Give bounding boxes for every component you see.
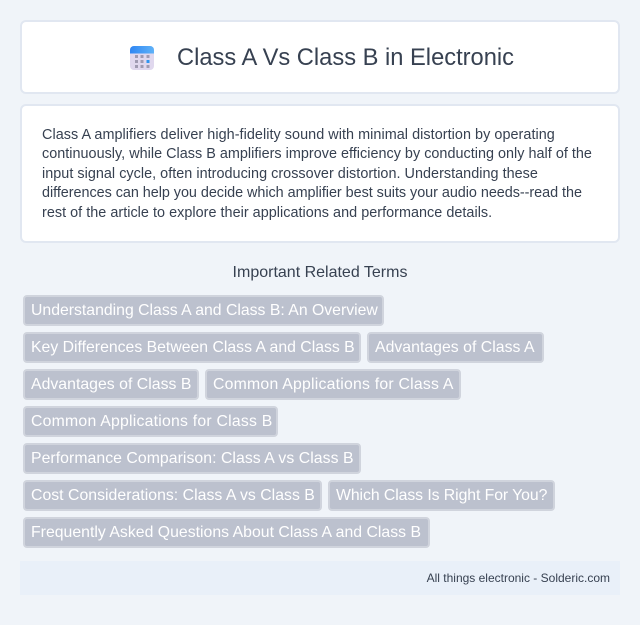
- tag list: related terms: Common Applications for Class A: [213, 376, 454, 393]
- footer text: All things electronic - Solderic.com: [427, 571, 610, 585]
- tag list: related terms: Performance Comparison: Class A vs Class B: [31, 450, 354, 467]
- text block: intro paragraph: rest of the article to explore their applications and performance details.: [42, 205, 492, 221]
- tag list: related terms: Frequently Asked Questions About Class A and Class B: [31, 524, 421, 541]
- tag list: related terms: Cost Considerations: Class A vs Class B: [31, 487, 315, 504]
- text block: intro paragraph: input signal cycle, often introducing crossover distortion. Understanding these: [42, 166, 538, 182]
- tag list: related terms: Key Differences Between Class A and Class B: [31, 339, 355, 356]
- footer bar: [20, 561, 620, 595]
- tag list: related terms: Which Class Is Right For You?: [336, 487, 547, 504]
- heading: important related terms: Important Related Terms: [233, 264, 407, 281]
- icon: calendar: [130, 46, 154, 70]
- panel: title header: [20, 20, 620, 94]
- text block: intro paragraph: [42, 127, 592, 221]
- tag list: related terms: [23, 295, 555, 548]
- text block: intro paragraph: continuously, while Class B amplifiers improve efficiency by conducting only half of the: [42, 146, 592, 162]
- panel: intro text: [20, 104, 620, 243]
- text block: intro paragraph: Class A amplifiers deliver high-fidelity sound with minimal distortion by operating: [42, 127, 555, 143]
- text block: intro paragraph: differences can help you decide which amplifier best suits your audio needs--read the: [42, 185, 582, 201]
- tag list: related terms: Advantages of Class A: [375, 339, 535, 356]
- tag list: related terms: Understanding Class A and Class B: An Overview: [31, 302, 378, 319]
- heading: title: Class A Vs Class B in Electronic: [177, 45, 514, 71]
- tag list: related terms: Common Applications for Class B: [31, 413, 273, 430]
- tag list: related terms: Advantages of Class B: [31, 376, 191, 393]
